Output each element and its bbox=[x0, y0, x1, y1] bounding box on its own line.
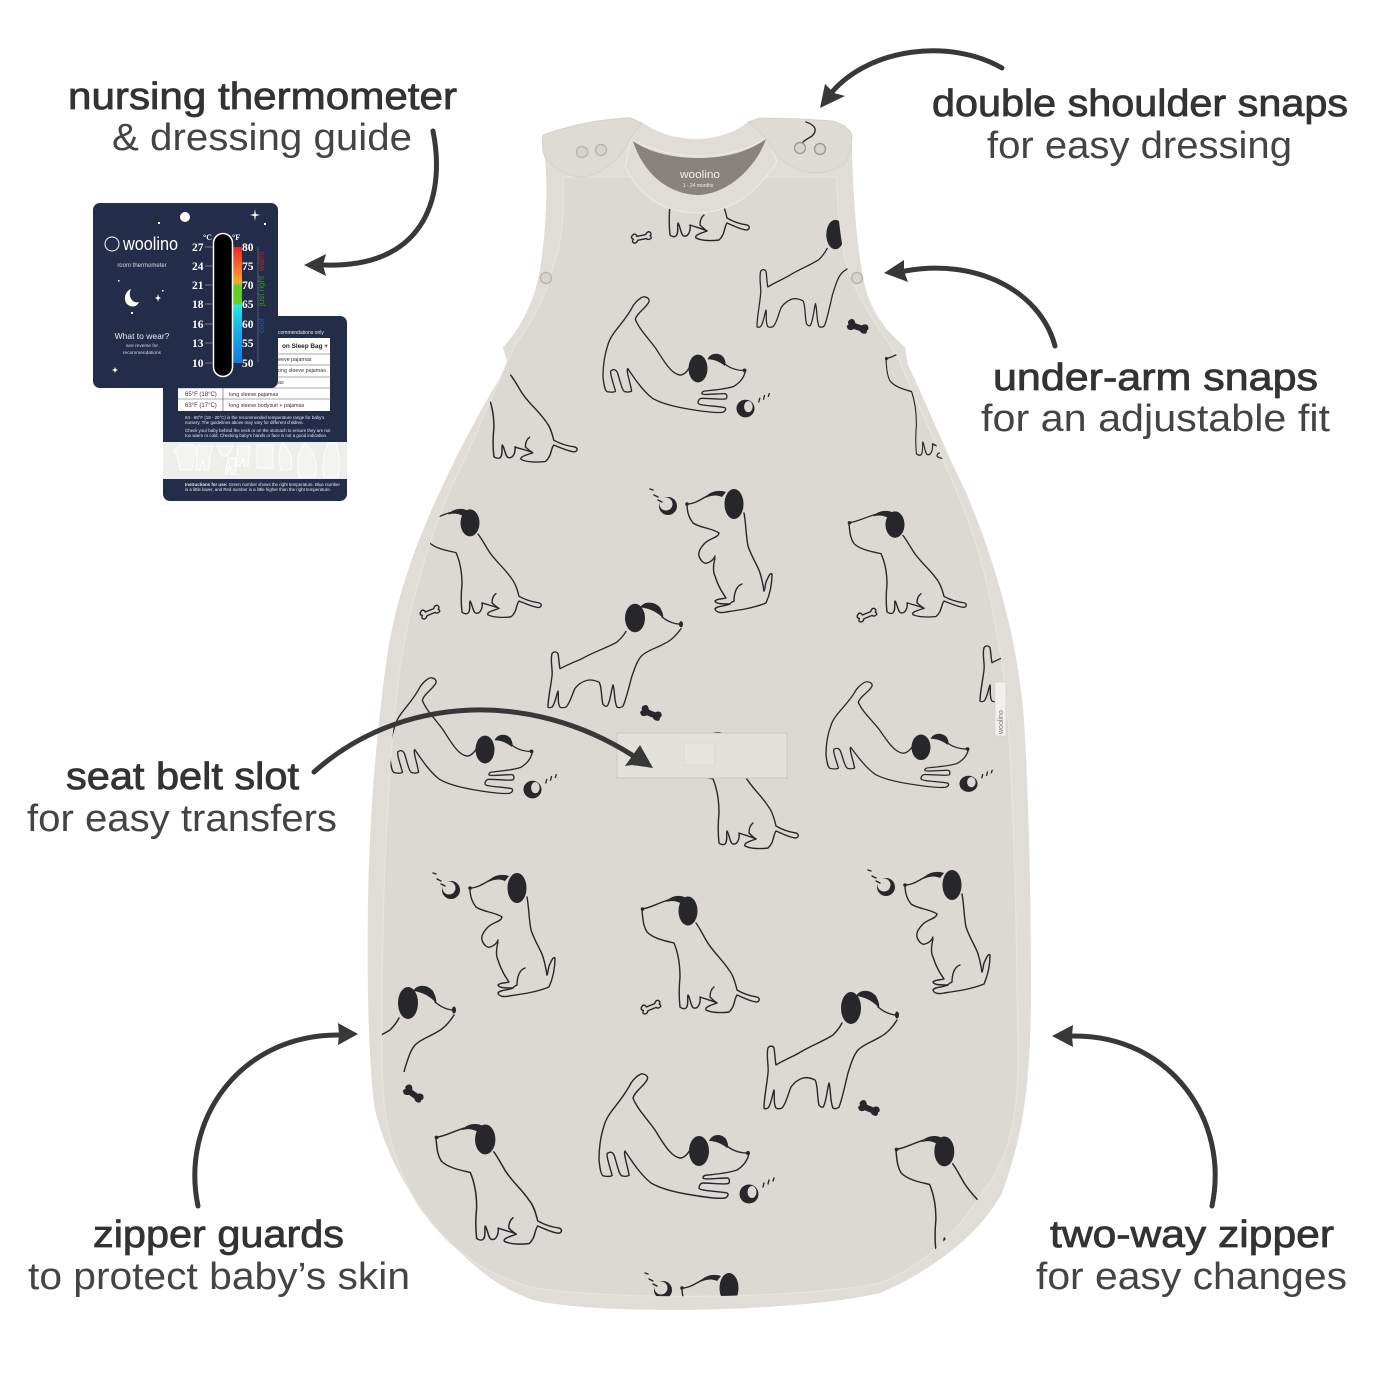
guidance notes: nursery. The guidelines above may vary for different children. bbox=[185, 420, 304, 425]
celsius scale: 18 bbox=[192, 299, 204, 311]
thermometer tube bbox=[214, 234, 232, 376]
recommendation table: as bbox=[278, 380, 284, 386]
usage instructions bbox=[185, 482, 340, 492]
callout: two-way zipper: for easy changes bbox=[1036, 1256, 1347, 1298]
thermometer front card bbox=[93, 203, 278, 388]
celsius scale: 16 bbox=[192, 319, 204, 331]
arrow: thermometer bbox=[304, 131, 436, 276]
dog print pattern bbox=[321, 124, 1115, 1397]
recommendation table: ong sleeve pajamas bbox=[278, 368, 326, 374]
callout: under-arm snaps: for an adjustable fit bbox=[981, 398, 1330, 440]
under-arm snap right bbox=[852, 272, 862, 284]
side woolino tag: woolino bbox=[998, 710, 1005, 735]
temperature labels: cool bbox=[257, 318, 266, 333]
recommendation table bbox=[178, 338, 330, 411]
celsius scale: 24 bbox=[192, 261, 204, 273]
callout: zipper guards: to protect baby’s skin bbox=[28, 1256, 410, 1298]
celsius scale: 10 bbox=[192, 358, 204, 370]
side woolino tag bbox=[995, 682, 1006, 736]
callout: zipper guards bbox=[28, 1214, 410, 1298]
fahrenheit scale: 65 bbox=[242, 299, 254, 311]
recommendation table: eeve pajamas bbox=[278, 357, 312, 363]
callout: nursing thermometer: nursing thermometer bbox=[68, 76, 457, 118]
guidance notes: Check your baby behind the neck or on the stomach to ensure they are not bbox=[185, 428, 331, 433]
arrow: two-way zipper bbox=[1052, 1025, 1215, 1206]
thermometer front card: room thermometer bbox=[117, 263, 167, 269]
callout: seat belt slot: seat belt slot bbox=[66, 756, 299, 798]
thermometer front card: What to wear? bbox=[115, 331, 170, 341]
arrow: under-arm snaps bbox=[884, 260, 1055, 346]
arrow: seat belt slot bbox=[314, 710, 653, 772]
clothing strip bbox=[163, 442, 347, 479]
guidance notes: 64 - 68°F (18 - 20°C) is the recommended temperature range for baby's bbox=[185, 415, 325, 420]
fahrenheit scale: 60 bbox=[242, 319, 254, 331]
callout: double shoulder snaps: for easy dressing bbox=[987, 125, 1292, 167]
celsius scale: °C bbox=[203, 233, 212, 242]
fahrenheit scale: 70 bbox=[242, 280, 254, 292]
celsius scale: 13 bbox=[192, 338, 204, 350]
callout: seat belt slot bbox=[27, 756, 337, 840]
callout: under-arm snaps bbox=[981, 357, 1330, 440]
bag body bbox=[368, 117, 1031, 1310]
thermometer reverse card bbox=[163, 316, 347, 501]
fahrenheit scale: °F bbox=[232, 233, 240, 242]
callout: double shoulder snaps: double shoulder snaps bbox=[932, 83, 1348, 125]
neck label: woolino bbox=[679, 169, 720, 181]
recommendation table: on Sleep Bag + bbox=[282, 343, 328, 350]
sleep bag garment bbox=[368, 117, 1031, 1310]
stars bbox=[155, 209, 266, 302]
recommendation table: 63°F (17°C) bbox=[185, 403, 217, 409]
fahrenheit scale: 80 bbox=[242, 242, 254, 254]
fahrenheit scale: 55 bbox=[242, 338, 254, 350]
thermometer front card: recommendations bbox=[123, 350, 162, 356]
arrow: shoulder snaps bbox=[820, 51, 1002, 108]
woolino logo bbox=[105, 234, 178, 254]
thermometer colour scale bbox=[233, 247, 242, 363]
celsius scale bbox=[192, 233, 213, 370]
guidance notes bbox=[185, 415, 331, 438]
neck label bbox=[679, 169, 720, 189]
callout: under-arm snaps: under-arm snaps bbox=[993, 357, 1318, 399]
callout: double shoulder snaps bbox=[932, 83, 1348, 167]
recommendation table: long sleeve bodysuit + pajamas bbox=[229, 403, 305, 409]
celsius scale: 27 bbox=[192, 242, 204, 254]
callout: seat belt slot: for easy transfers bbox=[27, 798, 337, 840]
right shoulder flap bbox=[748, 118, 852, 173]
thermometer front card: see reverse for bbox=[126, 343, 158, 349]
neck label: 1 - 24 months bbox=[683, 183, 714, 189]
under-arm snap left bbox=[540, 272, 552, 284]
woolino logo: woolino bbox=[122, 234, 178, 254]
neck collar bbox=[625, 137, 777, 213]
hanging hole bbox=[180, 212, 190, 222]
bag centre panel bbox=[382, 177, 1018, 1296]
recommendation table: 65°F (18°C) bbox=[185, 392, 217, 398]
arrow: zipper guards bbox=[195, 1023, 358, 1206]
temperature labels: warm bbox=[257, 251, 266, 272]
fahrenheit scale bbox=[232, 233, 254, 370]
left shoulder flap bbox=[542, 118, 642, 177]
inner neck lining bbox=[633, 139, 766, 195]
temperature labels: just right bbox=[257, 275, 266, 307]
usage instructions: is a little lower, and Red number is a little higher than the right temperature. bbox=[185, 487, 331, 492]
callout: two-way zipper bbox=[1036, 1214, 1347, 1298]
seat belt slot flap bbox=[617, 733, 787, 778]
moon icon bbox=[125, 289, 139, 306]
usage instructions: Instructions for use: Green number shows the right temperature. Blue number bbox=[185, 482, 340, 487]
callout: two-way zipper: two-way zipper bbox=[1050, 1214, 1334, 1256]
temperature labels bbox=[257, 251, 266, 333]
callout: nursing thermometer bbox=[68, 76, 457, 159]
fahrenheit scale: 50 bbox=[242, 358, 254, 370]
recommendation table: long sleeve pajamas bbox=[229, 392, 278, 398]
fahrenheit scale: 75 bbox=[242, 261, 254, 273]
callout: zipper guards: zipper guards bbox=[93, 1214, 344, 1256]
thermometer reverse card: commendations only bbox=[278, 330, 324, 336]
callout: nursing thermometer: & dressing guide bbox=[112, 117, 412, 159]
guidance notes: too warm or cold. Checking baby's hands or face is not a good indication. bbox=[185, 433, 327, 438]
celsius scale: 21 bbox=[192, 280, 204, 292]
